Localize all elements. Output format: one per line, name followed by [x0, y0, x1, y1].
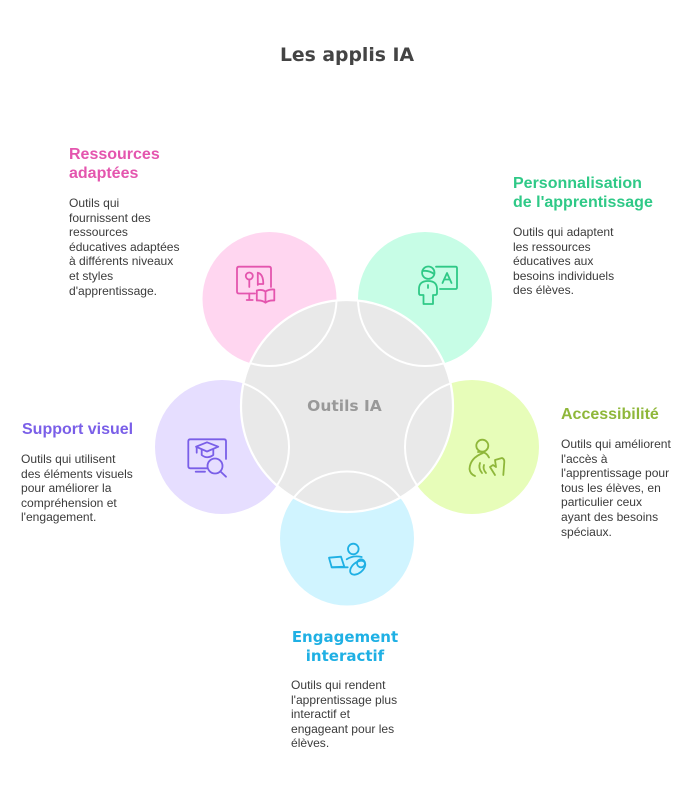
icon: person with touch gesture [470, 440, 504, 476]
description: Outils qui utilisent [21, 452, 115, 466]
heading: de l'apprentissage [513, 194, 653, 211]
heading: Engagement [292, 628, 398, 646]
description: ressources [69, 225, 128, 239]
circle: accessibilité [405, 380, 539, 514]
description: interactif et [291, 707, 350, 721]
description: d'apprentissage. [69, 284, 157, 298]
circle: personnalisation [358, 232, 492, 366]
text block: ressources adaptées [69, 146, 180, 298]
circle: support visuel [155, 380, 289, 514]
heading [513, 175, 653, 211]
circle: ressources adaptées [202, 232, 336, 366]
description: à différents niveaux [69, 254, 173, 268]
central circle [241, 300, 453, 512]
icon: graduate cap and magnifier [188, 439, 226, 477]
description: Outils qui [69, 196, 119, 210]
heading: adaptées [69, 165, 138, 182]
description: pour améliorer la [21, 481, 111, 495]
description [21, 452, 133, 524]
heading: Accessibilité [561, 406, 659, 423]
description: ayant des besoins [561, 510, 658, 524]
description: particulier ceux [561, 495, 642, 509]
icon: teacher and board [419, 266, 457, 304]
description: tous les élèves, en [561, 481, 661, 495]
description: Outils qui améliorent [561, 437, 671, 451]
heading [69, 146, 160, 182]
description [513, 225, 614, 297]
overlap arcs [244, 302, 450, 497]
description: l'accès à [561, 452, 608, 466]
text block: support visuel [21, 421, 133, 524]
icon: presentation screen and book [237, 267, 274, 303]
description: l'engagement. [21, 510, 96, 524]
venn diagram [155, 232, 539, 606]
description: et styles [69, 269, 113, 283]
description [561, 437, 671, 539]
heading: Ressources [69, 146, 160, 163]
description: éducatives adaptées [69, 240, 180, 254]
description [69, 196, 180, 298]
circle: engagement interactif [280, 472, 414, 606]
description: besoins individuels [513, 269, 614, 283]
central label: Outils IA [307, 396, 382, 414]
description [291, 678, 397, 750]
icon: learner with laptop [329, 544, 368, 577]
description: Outils qui rendent [291, 678, 385, 692]
heading: interactif [306, 647, 384, 665]
text block: accessibilité [561, 406, 671, 539]
description: les ressources [513, 240, 591, 254]
title: Les applis IA [280, 45, 414, 66]
description: fournissent des [69, 211, 151, 225]
description: spéciaux. [561, 525, 612, 539]
heading: Personnalisation [513, 175, 642, 192]
heading: Support visuel [22, 421, 133, 438]
description: éducatives aux [513, 254, 593, 268]
text block: engagement interactif [291, 628, 398, 750]
description: l'apprentissage pour [561, 466, 669, 480]
description: compréhension et [21, 496, 117, 510]
description: des élèves. [513, 283, 574, 297]
description: l'apprentissage plus [291, 693, 397, 707]
description: Outils qui adaptent [513, 225, 613, 239]
description: engageant pour les [291, 722, 394, 736]
heading [292, 628, 398, 665]
description: des éléments visuels [21, 467, 133, 481]
description: élèves. [291, 736, 329, 750]
text block: personnalisation [513, 175, 653, 297]
